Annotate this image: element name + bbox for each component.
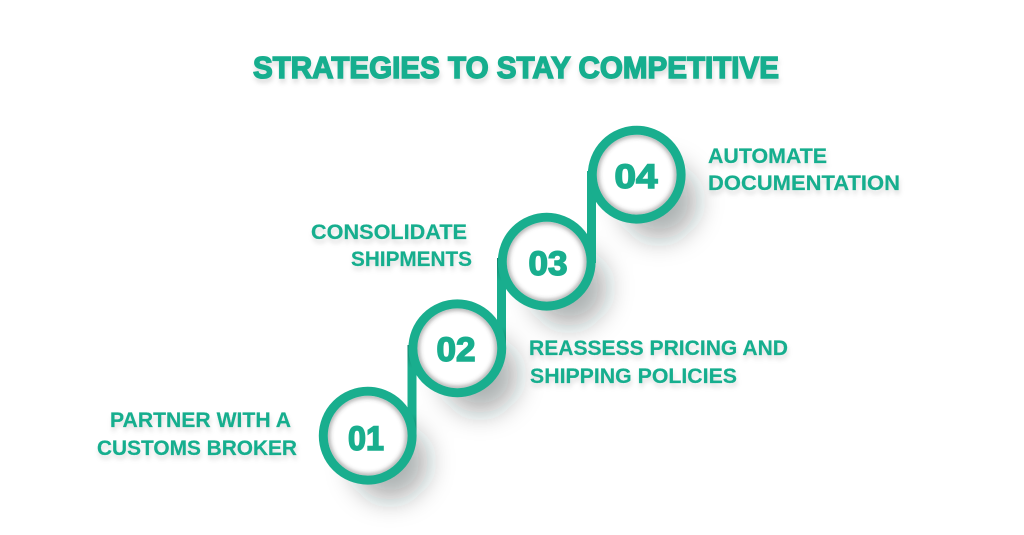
connector: 03 to 04 xyxy=(587,171,596,263)
label 02: SHIPPING POLICIES xyxy=(530,365,737,388)
label 03: SHIPMENTS xyxy=(351,248,472,271)
title: STRATEGIES TO STAY COMPETITIVE xyxy=(253,50,779,85)
label 04 xyxy=(708,145,900,195)
number 02: 02 xyxy=(436,331,476,369)
label 03 xyxy=(311,221,472,271)
label 04: DOCUMENTATION xyxy=(708,172,900,195)
label 03: CONSOLIDATE xyxy=(311,221,467,244)
step 02 xyxy=(413,304,502,393)
step 04 xyxy=(592,130,681,219)
label 02: REASSESS PRICING AND xyxy=(529,337,788,360)
number 01: 01 xyxy=(348,420,384,458)
shadow: circle drop shadows xyxy=(352,163,697,500)
label 01 xyxy=(97,409,297,460)
connector: 01 to 02 xyxy=(408,345,416,437)
number 03: 03 xyxy=(528,245,568,283)
label 04: AUTOMATE xyxy=(708,145,827,168)
connector: 02 to 03 xyxy=(497,258,506,350)
step 03 xyxy=(502,217,591,306)
number 04: 04 xyxy=(614,158,658,196)
label 01: PARTNER WITH A xyxy=(110,409,291,432)
label 01: CUSTOMS BROKER xyxy=(97,437,297,460)
label 02 xyxy=(529,337,788,388)
step 01 xyxy=(323,391,412,480)
